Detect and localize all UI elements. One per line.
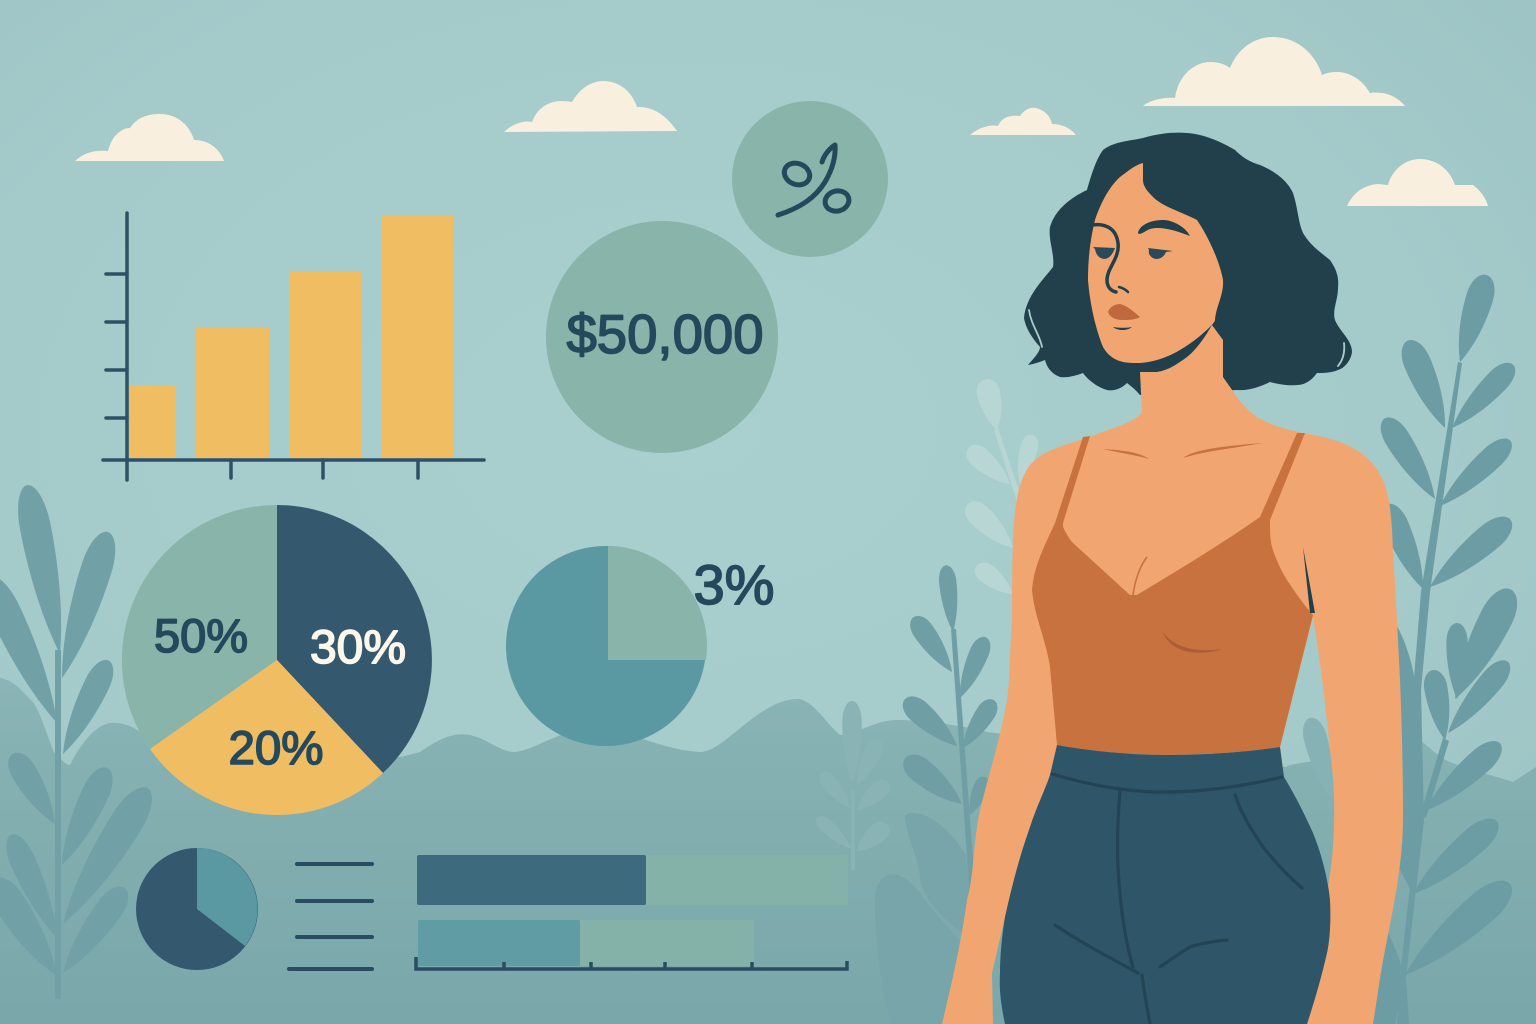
nostril: [1119, 287, 1128, 292]
left brow and nose line: [1092, 225, 1118, 292]
brows: [1138, 220, 1190, 236]
plant: faint behind figure: [960, 377, 1041, 602]
hair: [1024, 133, 1352, 395]
axes: [103, 213, 484, 480]
plant: behind figure left: [897, 564, 1002, 900]
label: 3%: 3%: [694, 553, 774, 616]
bars: [130, 216, 454, 458]
collarbones: [1103, 443, 1262, 459]
main pie chart: 50%: [154, 609, 248, 662]
plant: leaf in gap beside waist: [1299, 715, 1343, 803]
cloud: right: [1347, 159, 1488, 206]
plant: dark shapes behind left arm: [875, 813, 975, 1024]
cloud: small upper right: [970, 108, 1076, 135]
trouser lines: [1052, 774, 1302, 1024]
cleavage crease: [1133, 557, 1147, 595]
amount bubble: $50,000: [566, 303, 764, 365]
cloud: upper right large: [1143, 37, 1405, 106]
hills: [0, 678, 1536, 1024]
small pie chart: [506, 546, 707, 746]
main pie chart: 30%: [310, 620, 406, 673]
underarm shadow: [1303, 547, 1315, 613]
amount bubble: [546, 221, 778, 453]
cloud: top left: [75, 114, 224, 161]
main pie chart: 20%: [228, 721, 324, 774]
woman figure: [942, 133, 1403, 1024]
plant: far right: [1370, 271, 1525, 1024]
main pie chart: [122, 505, 432, 815]
mini pie chart: [136, 848, 258, 970]
cloud: top centre: [504, 81, 677, 132]
clothing folds: [1162, 631, 1223, 653]
neck and body skin: [942, 325, 1403, 1024]
bar chart: [103, 213, 484, 480]
face: [1088, 163, 1223, 363]
hair strands: [1029, 310, 1344, 366]
lips: [1108, 304, 1140, 320]
top: [1032, 433, 1313, 755]
plant: far left: [0, 482, 162, 999]
horizontal bars: [416, 855, 848, 969]
left eye: [1093, 247, 1115, 259]
trousers: [1000, 745, 1330, 1024]
plant: faint centre: [813, 701, 894, 870]
under lip: [1113, 327, 1132, 330]
percent bubble: [732, 101, 888, 257]
legend lines: [289, 864, 372, 969]
right eye: [1148, 248, 1173, 259]
